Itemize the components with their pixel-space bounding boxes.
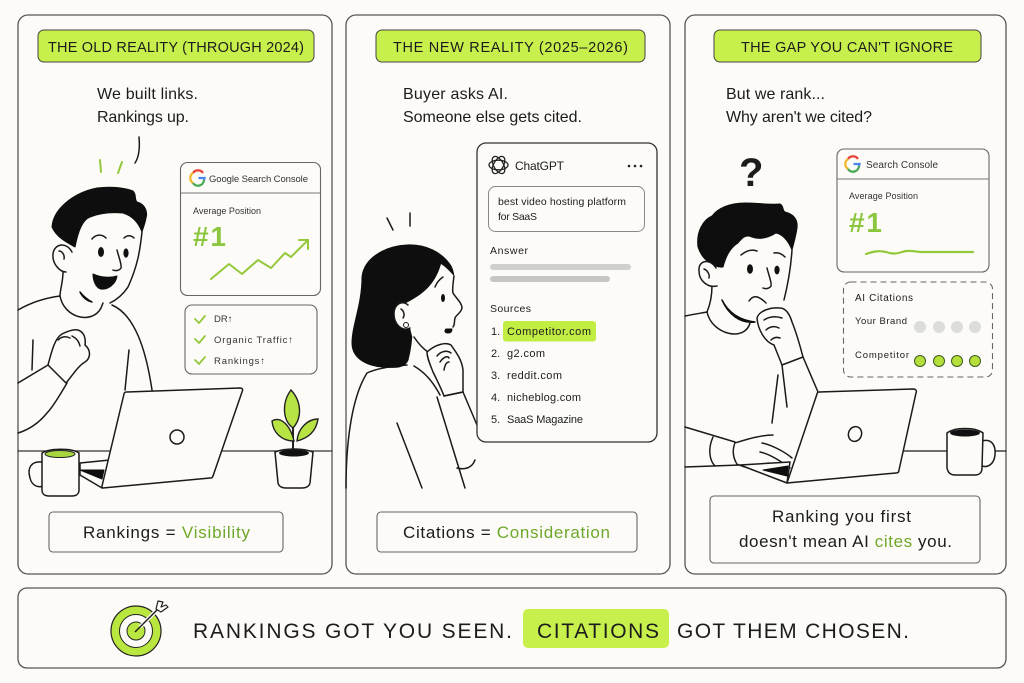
card: search console: Average Position bbox=[849, 191, 918, 201]
icon: chatgpt logo bbox=[489, 154, 508, 176]
card: ai citations: Competitor bbox=[855, 350, 909, 361]
illustration: puzzled man bbox=[685, 203, 818, 478]
card: ai citations: AI Citations bbox=[855, 293, 913, 304]
attention marks bbox=[387, 213, 410, 230]
speech text: buyer asks ai: Buyer asks AI. bbox=[403, 86, 508, 103]
headline: CITATIONS bbox=[537, 620, 659, 643]
card: google search console bbox=[180, 162, 320, 296]
excitement marks bbox=[100, 137, 139, 173]
prompt box: best video hosting platform bbox=[498, 196, 626, 208]
sources list: SaaS Magazine bbox=[507, 414, 583, 426]
line chart: rising bbox=[211, 240, 308, 279]
icon: laptop bbox=[740, 389, 916, 483]
equation: citations = consideration: Citations = Consideration bbox=[403, 523, 610, 542]
checklist card: Organic Traffic↑ bbox=[214, 335, 293, 346]
card: ai citations: Your Brand bbox=[855, 316, 907, 327]
sources list: 3. bbox=[491, 370, 500, 382]
checklist card: DR↑ bbox=[214, 314, 232, 325]
desk line bbox=[900, 450, 1006, 452]
card: ai citations bbox=[844, 282, 992, 377]
headline: RANKINGS GOT YOU SEEN. bbox=[193, 620, 512, 643]
speech text: we built links: Rankings up. bbox=[97, 109, 189, 126]
panel: the old reality bbox=[18, 15, 332, 574]
callout: ranking first bbox=[710, 496, 980, 563]
sources list: g2.com bbox=[507, 348, 545, 360]
competitor dots bbox=[914, 356, 980, 366]
callout: ranking first: Ranking you first bbox=[772, 507, 911, 526]
equation: rankings = visibility: Rankings = Visibility bbox=[83, 523, 250, 542]
heading: old reality bbox=[38, 30, 314, 62]
prompt box: for SaaS bbox=[498, 211, 537, 223]
heading: old reality: THE OLD REALITY (THROUGH 2024) bbox=[48, 40, 304, 56]
sources list: 5. bbox=[491, 414, 500, 426]
icon: coffee mug bbox=[947, 428, 995, 475]
card: chatgpt answer: Sources bbox=[490, 303, 531, 315]
card: google search console: #1 bbox=[193, 221, 226, 252]
icon: target with arrow bbox=[111, 601, 168, 656]
icon: google g bbox=[845, 156, 860, 172]
line chart: flat bbox=[866, 251, 973, 254]
sources list bbox=[491, 321, 596, 426]
illustration: celebrating man bbox=[18, 187, 152, 433]
headline bbox=[193, 609, 909, 648]
sources list: Competitor.com bbox=[507, 326, 591, 338]
speech text: but we rank: But we rank... bbox=[726, 86, 825, 103]
card: chatgpt answer: ChatGPT bbox=[515, 159, 565, 173]
sources list: 2. bbox=[491, 348, 500, 360]
card: search console: #1 bbox=[849, 207, 882, 238]
illustration: thinking woman bbox=[346, 245, 477, 488]
panel: the gap bbox=[685, 15, 1006, 574]
sources list: 1. bbox=[491, 326, 500, 338]
checklist card bbox=[185, 305, 317, 374]
speech text: buyer asks ai: Someone else gets cited. bbox=[403, 109, 582, 126]
menu dots bbox=[628, 165, 642, 167]
card: google search console: Average Position bbox=[193, 206, 261, 216]
equation: rankings = visibility bbox=[49, 512, 283, 552]
icon: laptop bbox=[80, 388, 243, 488]
your brand dots bbox=[914, 321, 981, 333]
checklist card: Rankings↑ bbox=[214, 356, 265, 367]
callout: ranking first: doesn't mean AI cites you. bbox=[739, 532, 952, 551]
card: search console bbox=[837, 149, 989, 272]
icon: coffee mug bbox=[29, 449, 79, 496]
heading: the gap: THE GAP YOU CAN'T IGNORE bbox=[741, 40, 953, 56]
prompt box bbox=[488, 186, 644, 232]
sources list: nicheblog.com bbox=[507, 392, 581, 404]
heading: new reality bbox=[376, 30, 645, 62]
desk line bbox=[18, 450, 332, 452]
speech text: but we rank bbox=[726, 86, 872, 126]
card: google search console: Google Search Console bbox=[209, 174, 308, 185]
speech text: we built links bbox=[97, 86, 198, 126]
icon: google g bbox=[190, 170, 204, 186]
panel: the new reality bbox=[346, 15, 670, 574]
card: chatgpt answer bbox=[477, 143, 657, 442]
headline: GOT THEM CHOSEN. bbox=[677, 620, 909, 643]
equation: citations = consideration bbox=[377, 512, 637, 552]
card: search console: Search Console bbox=[866, 160, 938, 171]
heading: new reality: THE NEW REALITY (2025–2026) bbox=[393, 40, 628, 56]
icon: question mark: ? bbox=[739, 151, 763, 195]
speech text: buyer asks ai bbox=[403, 86, 582, 126]
heading: the gap bbox=[714, 30, 981, 62]
sources list: 4. bbox=[491, 392, 500, 404]
speech text: we built links: We built links. bbox=[97, 86, 198, 103]
banner: takeaway bbox=[18, 588, 1006, 668]
speech text: but we rank: Why aren't we cited? bbox=[726, 109, 872, 126]
icon: potted plant bbox=[272, 390, 318, 488]
sources list: reddit.com bbox=[507, 370, 562, 382]
placeholder answer lines bbox=[490, 264, 631, 282]
card: chatgpt answer: Answer bbox=[490, 245, 528, 257]
